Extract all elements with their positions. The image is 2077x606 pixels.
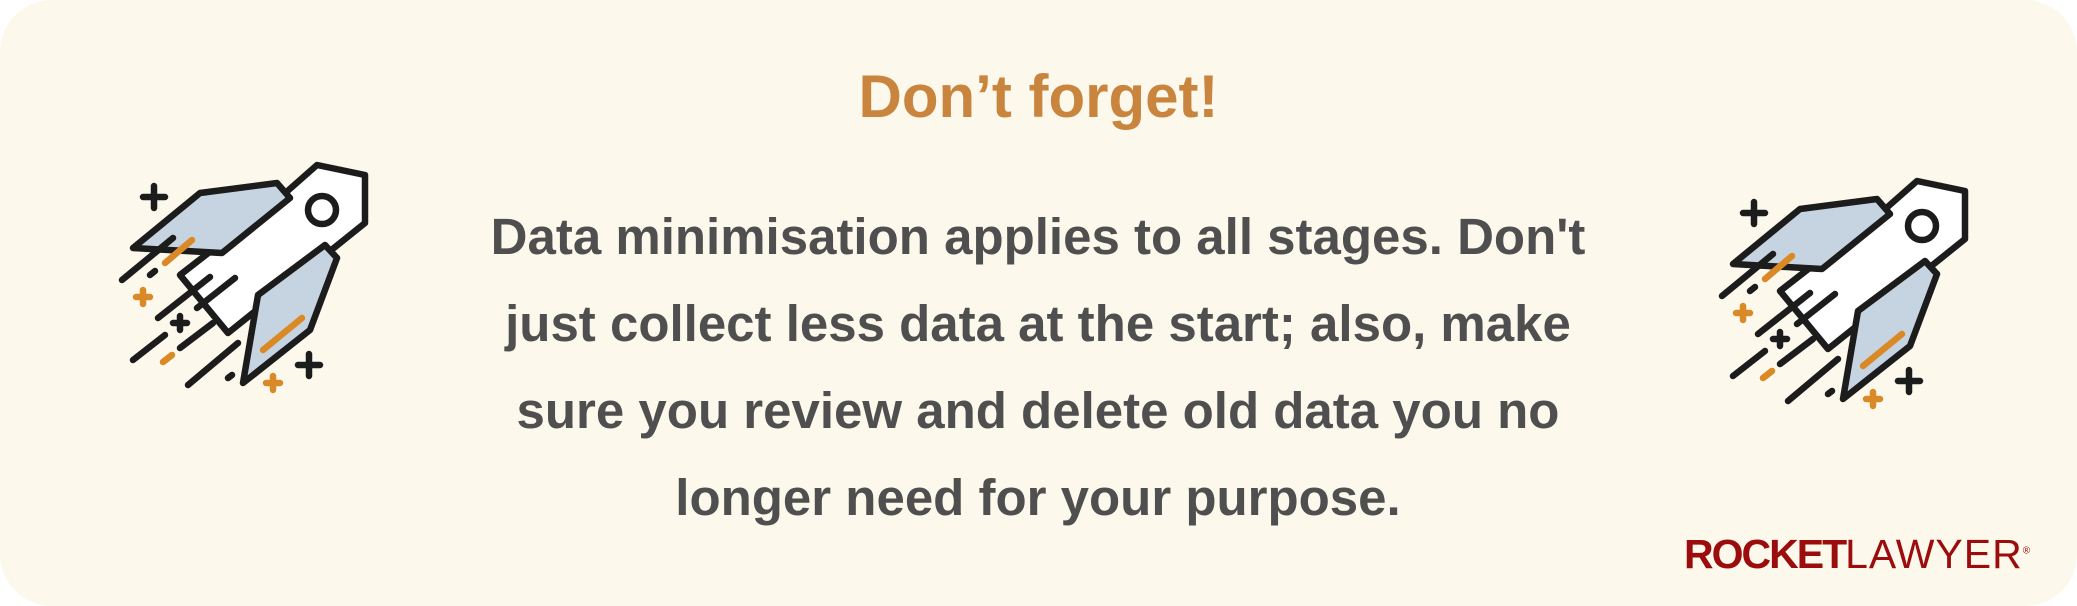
body text — [491, 208, 1585, 526]
icon: rocket left — [118, 162, 368, 394]
body text: longer need for your purpose. — [675, 469, 1401, 526]
body text: sure you review and delete old data you no — [517, 382, 1559, 439]
logo: ROCKETLAWYER® — [1684, 531, 2030, 577]
body text: just collect less data at the start; also, make — [505, 295, 1571, 352]
icon: rocket right — [1718, 178, 1968, 410]
title: Don’t forget! — [859, 63, 1218, 130]
body text: Data minimisation applies to all stages. Don't — [491, 208, 1585, 265]
